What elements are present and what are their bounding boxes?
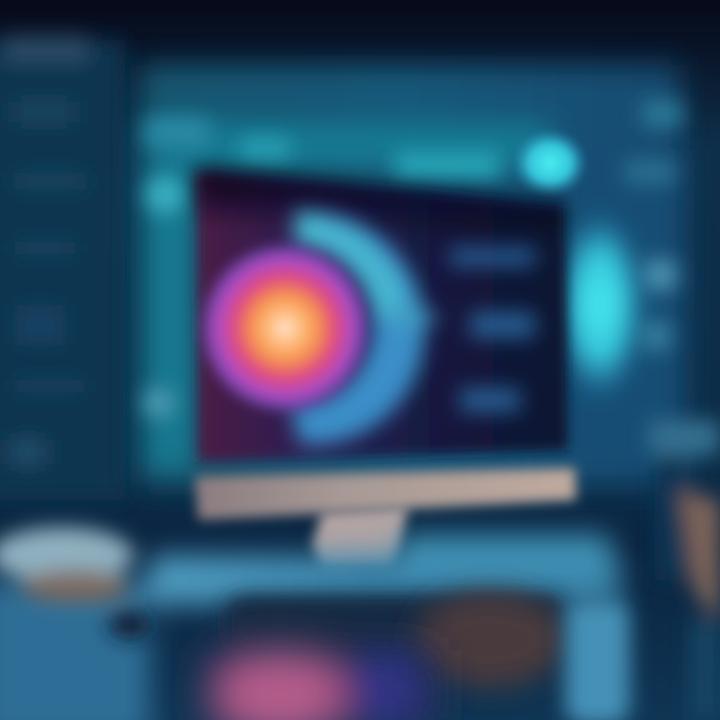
chart: blue ring (290, 210, 442, 445)
sidebar and header highlights (145, 100, 682, 416)
object: left mouse (0, 527, 152, 639)
reflection: light blue right (565, 600, 630, 720)
desk (0, 535, 620, 720)
icon: glowing cyan circle top (512, 129, 588, 197)
monitor bottom bezel (195, 468, 576, 520)
monitor screen (197, 168, 568, 462)
icon: glowing cyan oval right (554, 209, 646, 401)
text block: blurred screen labels (450, 248, 535, 412)
panel: left sidebar (0, 36, 125, 500)
object: brown item on desk (415, 592, 565, 688)
chart: glowing radial core (199, 242, 371, 414)
monitor stand (312, 506, 408, 568)
keyboard base (225, 595, 565, 655)
reflection: screen colours on the desk (205, 650, 435, 720)
top edge shadow of screen (197, 168, 565, 240)
panel: back window (140, 65, 685, 485)
object: right foreground hand (650, 420, 720, 720)
